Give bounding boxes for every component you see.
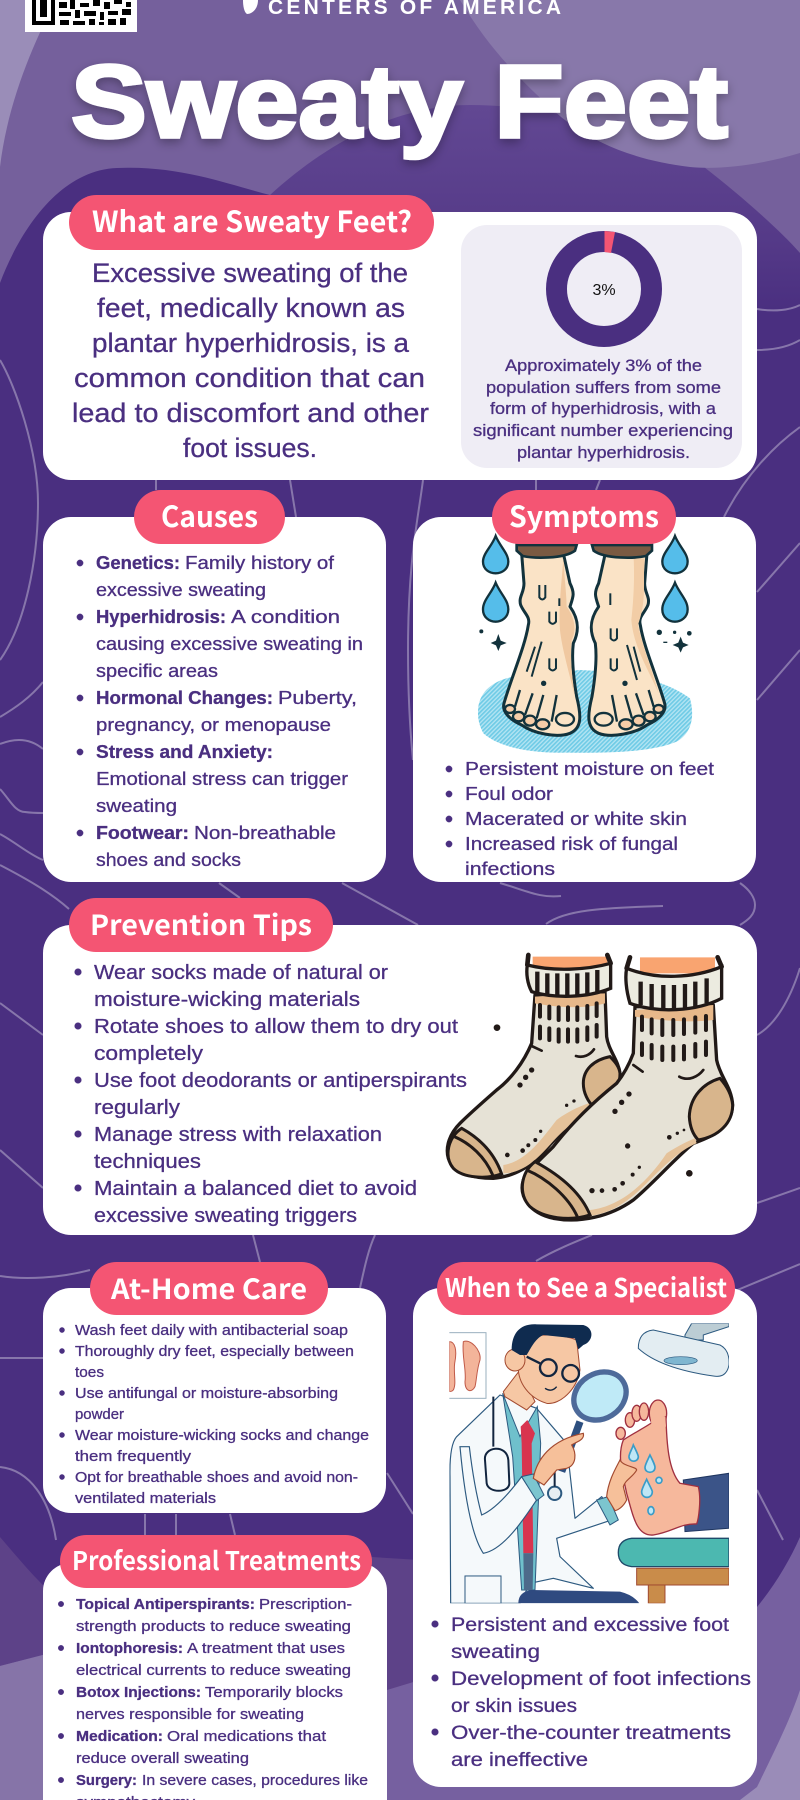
list: professional treatments: Temporarily blocks xyxy=(205,1684,343,1701)
heading: prevention tips xyxy=(69,898,333,952)
text: definition: common condition that can xyxy=(74,363,425,393)
text: statistic: significant number experiencing xyxy=(473,422,733,440)
left sock xyxy=(447,955,620,1178)
heading: what are sweaty feet: What are Sweaty Feet? xyxy=(92,199,412,241)
list: causes xyxy=(77,552,363,870)
left foot xyxy=(504,545,580,735)
heading: symptoms xyxy=(492,490,676,544)
qr code xyxy=(25,0,137,32)
list: prevention tips: completely xyxy=(94,1043,203,1065)
heading: when to see a specialist xyxy=(437,1262,735,1315)
list: causes: Hyperhidrosis: xyxy=(96,606,226,627)
donut chart: 3%: 3% xyxy=(592,282,616,299)
heading: prevention tips: Prevention Tips xyxy=(90,904,312,944)
illustration: wet feet xyxy=(478,536,692,753)
text: definition xyxy=(72,258,429,463)
magnifying glass xyxy=(562,1362,635,1472)
list: professional treatments: Topical Antiperspirants: xyxy=(76,1596,255,1613)
list: at-home care xyxy=(59,1323,369,1507)
list: professional treatments: nerves responsible for sweating xyxy=(76,1706,304,1723)
list: professional treatments: Iontophoresis: xyxy=(76,1640,183,1657)
water drops xyxy=(483,536,688,622)
right foot xyxy=(589,545,665,735)
list: causes: Hormonal Changes: xyxy=(96,687,273,708)
text: statistic xyxy=(473,357,733,462)
list: symptoms: Macerated or white skin xyxy=(465,808,687,829)
list: professional treatments: Medication: xyxy=(76,1728,163,1745)
doctor xyxy=(450,1324,639,1603)
list: at-home care: Wash feet daily with antibacterial soap xyxy=(75,1323,348,1339)
list: at-home care: powder xyxy=(75,1407,124,1423)
list: causes: specific areas xyxy=(96,660,218,681)
list: causes: Family history of xyxy=(185,552,335,573)
list: symptoms: Increased risk of fungal xyxy=(465,833,678,854)
text: statistic: form of hyperhidrosis, with a xyxy=(490,400,717,418)
illustration: socks xyxy=(447,955,733,1220)
text: statistic: Approximately 3% of the xyxy=(505,357,702,375)
list: prevention tips: moisture-wicking materials xyxy=(94,989,360,1011)
heading: what are sweaty feet xyxy=(69,195,434,250)
list: prevention tips: Manage stress with relaxation xyxy=(94,1124,382,1146)
list: causes: Stress and Anxiety: xyxy=(96,741,273,762)
list: professional treatments: Surgery: xyxy=(76,1772,137,1789)
wall chart xyxy=(449,1332,486,1399)
ceiling lamp xyxy=(638,1323,729,1376)
list: specialist: Persistent and excessive foot xyxy=(451,1614,730,1636)
text: definition: Excessive sweating of the xyxy=(92,258,408,288)
panel: symptoms xyxy=(413,490,756,882)
list: prevention tips: Maintain a balanced diet to avoid xyxy=(94,1178,417,1200)
heading: causes xyxy=(134,490,285,544)
heading: when to see a specialist: When to See a Specialist xyxy=(445,1268,727,1305)
list: professional treatments xyxy=(58,1596,368,1800)
heading: professional treatments: Professional Treatments xyxy=(72,1541,361,1578)
list: professional treatments: In severe cases, procedures like xyxy=(142,1772,368,1789)
list: causes: pregnancy, or menopause xyxy=(96,714,331,735)
list: specialist: Development of foot infections xyxy=(451,1668,751,1690)
list: causes: shoes and socks xyxy=(96,849,241,870)
list: professional treatments: A treatment that uses xyxy=(187,1640,345,1657)
text: definition: plantar hyperhidrosis, is a xyxy=(92,328,410,358)
list: causes: Genetics: xyxy=(96,552,180,573)
text: definition: foot issues. xyxy=(183,433,317,463)
heading: symptoms: Symptoms xyxy=(509,494,659,536)
list: at-home care: Opt for breathable shoes and avoid non- xyxy=(75,1470,358,1486)
text: statistic: population suffers from some xyxy=(486,379,721,397)
list: specialist xyxy=(432,1614,751,1771)
panel: prevention tips xyxy=(43,898,757,1235)
list: at-home care: Thoroughly dry feet, especially between xyxy=(75,1344,354,1360)
list: prevention tips: regularly xyxy=(94,1097,180,1119)
text: definition: lead to discomfort and other xyxy=(72,398,429,428)
panel: at-home care xyxy=(43,1262,386,1513)
list: causes: causing excessive sweating in xyxy=(96,633,363,654)
list: at-home care: ventilated materials xyxy=(75,1491,216,1507)
list: prevention tips: excessive sweating triggers xyxy=(94,1205,357,1227)
donut chart: 3% xyxy=(556,231,652,336)
list: professional treatments: Botox Injections: xyxy=(76,1684,201,1701)
foot xyxy=(607,1400,729,1535)
list: symptoms: infections xyxy=(465,858,555,879)
title: Sweaty Feet xyxy=(71,44,728,159)
heading: at-home care xyxy=(90,1262,328,1315)
panel: what are sweaty feet xyxy=(43,195,757,480)
exam table xyxy=(618,1538,729,1603)
list: professional treatments: Prescription- xyxy=(259,1596,352,1613)
list: causes: Non-breathable xyxy=(194,822,336,843)
list: prevention tips: techniques xyxy=(94,1151,201,1173)
panel: when to see a specialist xyxy=(413,1262,757,1787)
list: causes: A condition xyxy=(231,606,340,627)
list: prevention tips: Wear socks made of natural or xyxy=(94,962,388,984)
list: prevention tips xyxy=(75,962,467,1227)
list: symptoms: Persistent moisture on feet xyxy=(465,758,714,779)
list: symptoms xyxy=(446,758,714,879)
text: definition: feet, medically known as xyxy=(97,293,405,323)
list: symptoms: Foul odor xyxy=(465,783,553,804)
list: prevention tips: Use foot deodorants or antiperspirants xyxy=(94,1070,467,1092)
heading: at-home care: At-Home Care xyxy=(110,1268,307,1308)
sparkles xyxy=(479,629,692,653)
list: causes: Footwear: xyxy=(96,822,189,843)
heading: professional treatments xyxy=(60,1535,372,1588)
list: prevention tips: Rotate shoes to allow them to dry out xyxy=(94,1016,458,1038)
stat card xyxy=(461,225,742,468)
list: causes: excessive sweating xyxy=(96,579,266,600)
list: causes: Puberty, xyxy=(278,687,357,708)
list: at-home care: them frequently xyxy=(75,1449,192,1465)
list: professional treatments: electrical currents to reduce sweating xyxy=(76,1662,351,1679)
list: specialist: are ineffective xyxy=(451,1749,588,1771)
list: professional treatments: strength products to reduce sweating xyxy=(76,1618,351,1635)
list: professional treatments: reduce overall sweating xyxy=(76,1750,249,1767)
right sock xyxy=(522,957,733,1220)
panel: professional treatments xyxy=(43,1535,387,1800)
text: statistic: plantar hyperhidrosis. xyxy=(517,444,690,462)
list: at-home care: Use antifungal or moisture-absorbing xyxy=(75,1386,338,1402)
heading: causes: Causes xyxy=(161,494,258,536)
list: causes: Emotional stress can trigger xyxy=(96,768,348,789)
doctor hands xyxy=(533,1433,584,1485)
list: professional treatments: Oral medications that xyxy=(167,1728,327,1745)
list: at-home care: toes xyxy=(75,1365,104,1381)
illustration: doctor examining foot xyxy=(443,1323,729,1603)
list: at-home care: Wear moisture-wicking socks and change xyxy=(75,1428,369,1444)
list: specialist: sweating xyxy=(451,1641,540,1663)
list: causes: sweating xyxy=(96,795,177,816)
list: specialist: or skin issues xyxy=(451,1695,577,1717)
list: specialist: Over-the-counter treatments xyxy=(451,1722,731,1744)
panel: causes xyxy=(43,490,386,882)
